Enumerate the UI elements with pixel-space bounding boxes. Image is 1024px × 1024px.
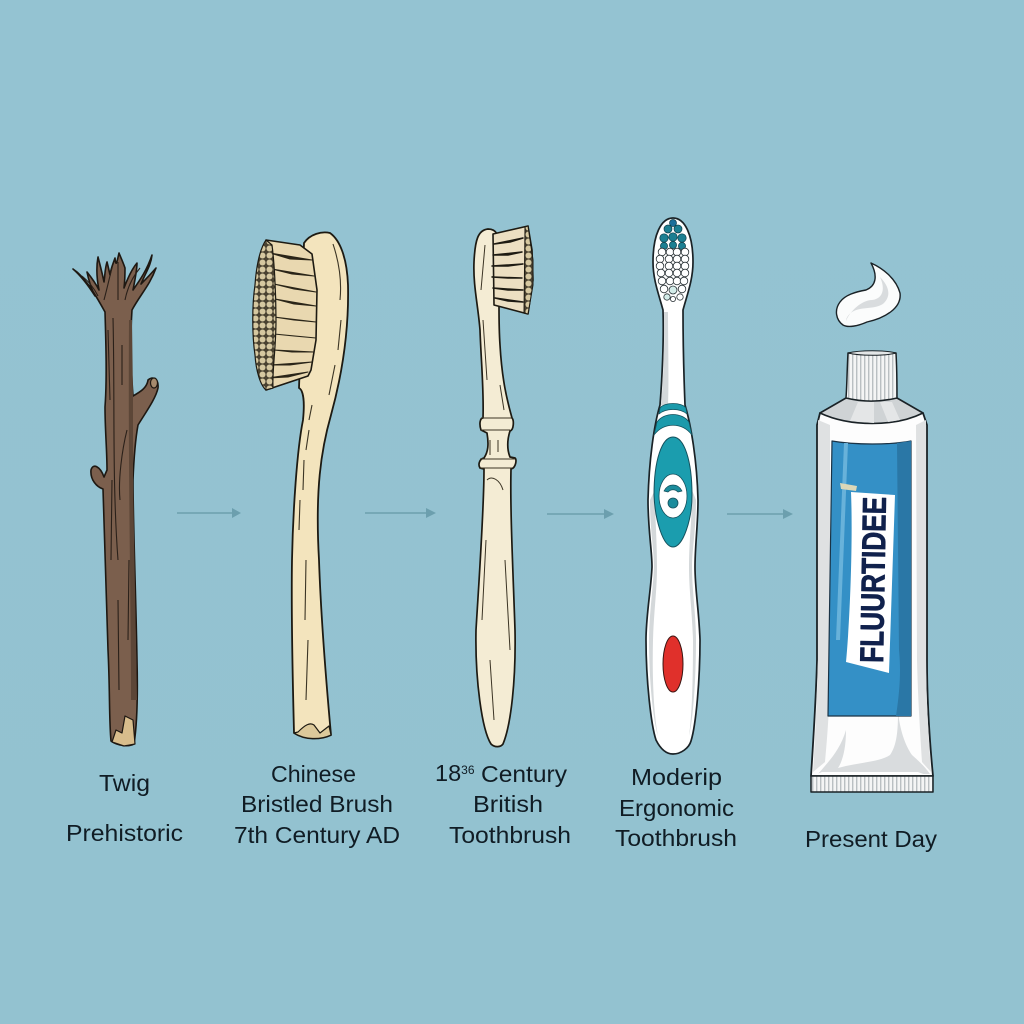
arrow 4	[727, 509, 793, 519]
icon: twig	[73, 253, 158, 746]
handle	[292, 232, 348, 739]
crimp	[811, 776, 933, 792]
label: Chinese bristled brush: 7th Century AD	[234, 822, 400, 848]
label: twig	[66, 770, 183, 846]
label: modern ergonomic toothbrush: Moderip	[631, 764, 722, 790]
broken base	[112, 716, 135, 746]
icon: toothpaste tube	[811, 351, 933, 792]
icon: 18th century British toothbrush	[474, 226, 533, 747]
label: Chinese bristled brush: Bristled Brush	[241, 791, 393, 817]
label: modern ergonomic toothbrush	[615, 764, 737, 851]
label: 18th century British toothbrush: 18	[435, 760, 461, 786]
teal bristles	[660, 220, 686, 250]
white bristles	[656, 248, 689, 302]
arrow 1	[177, 508, 241, 518]
logo oval	[659, 474, 687, 518]
label: modern ergonomic toothbrush: Toothbrush	[615, 825, 737, 851]
label: 18th century British toothbrush: Toothbrush	[449, 822, 571, 848]
handle and body	[646, 218, 700, 754]
side shading	[813, 420, 830, 772]
label: 18th century British toothbrush: British	[473, 791, 543, 817]
bristles	[493, 226, 533, 314]
label: modern ergonomic toothbrush: Ergonomic	[619, 795, 734, 821]
product label	[846, 492, 895, 673]
icon: toothpaste blob	[836, 263, 900, 326]
bristles	[266, 240, 317, 390]
handle	[474, 229, 516, 747]
bristle tips	[524, 226, 533, 314]
red grip	[663, 636, 683, 692]
knot end	[150, 378, 158, 388]
label: 18th century British toothbrush: 36	[461, 763, 475, 777]
label: twig: Prehistoric	[66, 820, 183, 846]
label: present day: Present Day	[805, 826, 937, 852]
label: 18th century British toothbrush	[435, 760, 571, 848]
arrow 2	[365, 508, 436, 518]
teal oval	[654, 437, 692, 547]
label: Chinese bristled brush: Chinese	[271, 761, 356, 787]
blue panel	[828, 441, 911, 716]
shoulder	[820, 398, 923, 424]
brand name: FLUURTIDEE	[853, 497, 893, 663]
teal bands	[659, 404, 687, 414]
tube body	[811, 413, 933, 776]
icon: modern ergonomic toothbrush	[646, 218, 700, 754]
label: twig: Twig	[99, 770, 150, 796]
arrow 3	[547, 509, 614, 519]
bristle tips	[253, 240, 276, 390]
cap	[846, 353, 897, 401]
label: 18th century British toothbrush: Century	[481, 761, 567, 787]
label: Chinese bristled brush	[234, 761, 400, 848]
icon: Chinese bristled brush	[253, 232, 348, 739]
